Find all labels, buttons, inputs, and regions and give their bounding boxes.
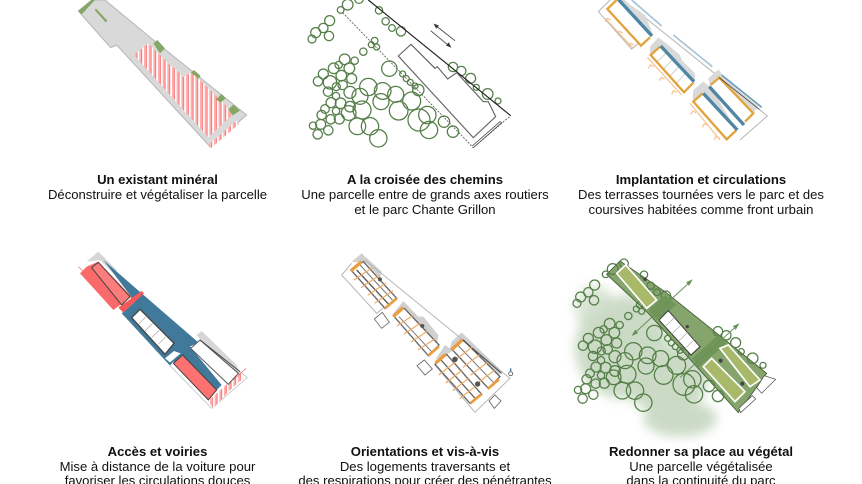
diagram: site context plan: [308, 0, 511, 148]
traffic arrows: [431, 24, 455, 47]
existing trees: [573, 259, 766, 411]
red parking south: [173, 355, 217, 400]
panel: implantation et circulations: coursives habitées comme front urbain: [589, 202, 813, 217]
description: Une parcelle entre de grands axes routiers: [301, 187, 549, 202]
north symbol: [509, 368, 513, 376]
panel: a la croisée des chemins: et le parc Chante Grillon: [354, 202, 496, 217]
south parcel outline: [170, 366, 247, 408]
building C: [693, 93, 737, 139]
red parking north: [80, 262, 132, 310]
dimension boxes: [374, 312, 501, 408]
green site ground: [607, 261, 767, 413]
panel: a la croisée des chemins: [301, 0, 549, 217]
parcel dashed limit: [343, 13, 511, 148]
central building: [659, 311, 700, 355]
panel: orientations et vis-à-vis: [298, 253, 552, 484]
site outline: [342, 263, 393, 313]
panel: redonner sa place au végétal: [573, 259, 793, 484]
description: Déconstruire et végétaliser la parcelle: [48, 187, 267, 202]
building B: [393, 308, 439, 356]
panel: accès et voiries: [60, 252, 256, 484]
hatched strip: [209, 121, 239, 148]
existing building: [398, 44, 496, 138]
crossing arrows: [633, 280, 738, 378]
building B: [651, 46, 694, 92]
parcel edge double line: [472, 122, 502, 148]
building D: [709, 78, 753, 125]
road edge: [368, 0, 511, 116]
building D: [452, 340, 502, 389]
title: Accès et voiries: [108, 444, 207, 459]
planted crossings: [648, 295, 727, 368]
title: Implantation et circulations: [616, 172, 786, 187]
central building: [132, 309, 174, 354]
diagram: building layout: [598, 0, 767, 140]
site outline: [598, 0, 647, 49]
stair cores: [643, 278, 744, 386]
diagram: planted site: [573, 259, 776, 437]
site ground: [78, 0, 247, 147]
existing trees: [308, 0, 501, 147]
grey shadows: [352, 253, 502, 377]
title: Redonner sa place au végétal: [609, 444, 793, 459]
blue circulation lines: [632, 0, 762, 107]
existing planting: [78, 0, 240, 115]
description: Une parcelle végétalisée: [629, 459, 773, 474]
description: Des logements traversants et: [340, 459, 511, 474]
diagram: orientations: [342, 253, 513, 412]
title: Un existant minéral: [97, 172, 218, 187]
orange terraces lines: [605, 18, 720, 140]
cast shadows: [618, 0, 758, 137]
panel: implantation et circulations: [578, 0, 824, 217]
title: Orientations et vis-à-vis: [351, 444, 499, 459]
stair cores: [378, 277, 480, 387]
roof access: [719, 78, 759, 109]
building A: [607, 0, 652, 46]
building C: [435, 354, 482, 403]
grey shadows: [87, 252, 240, 377]
title: A la croisée des chemins: [347, 172, 503, 187]
park planting wash: [575, 285, 717, 437]
description: Mise à distance de la voiture pour: [60, 459, 256, 474]
blue vehicle zone: [103, 260, 222, 392]
description: Des terrasses tournées vers le parc et des: [578, 187, 824, 202]
building A: [351, 262, 397, 308]
white corner: [757, 376, 776, 393]
planted roofs: [617, 265, 760, 402]
panel: un existant minéral: [48, 0, 267, 202]
diagram: mineral site plan: [78, 0, 247, 148]
diagram: access and roads: [78, 252, 247, 408]
hatched demolition zone: [134, 43, 232, 137]
hatch line: [78, 267, 87, 275]
white building south: [191, 340, 238, 384]
